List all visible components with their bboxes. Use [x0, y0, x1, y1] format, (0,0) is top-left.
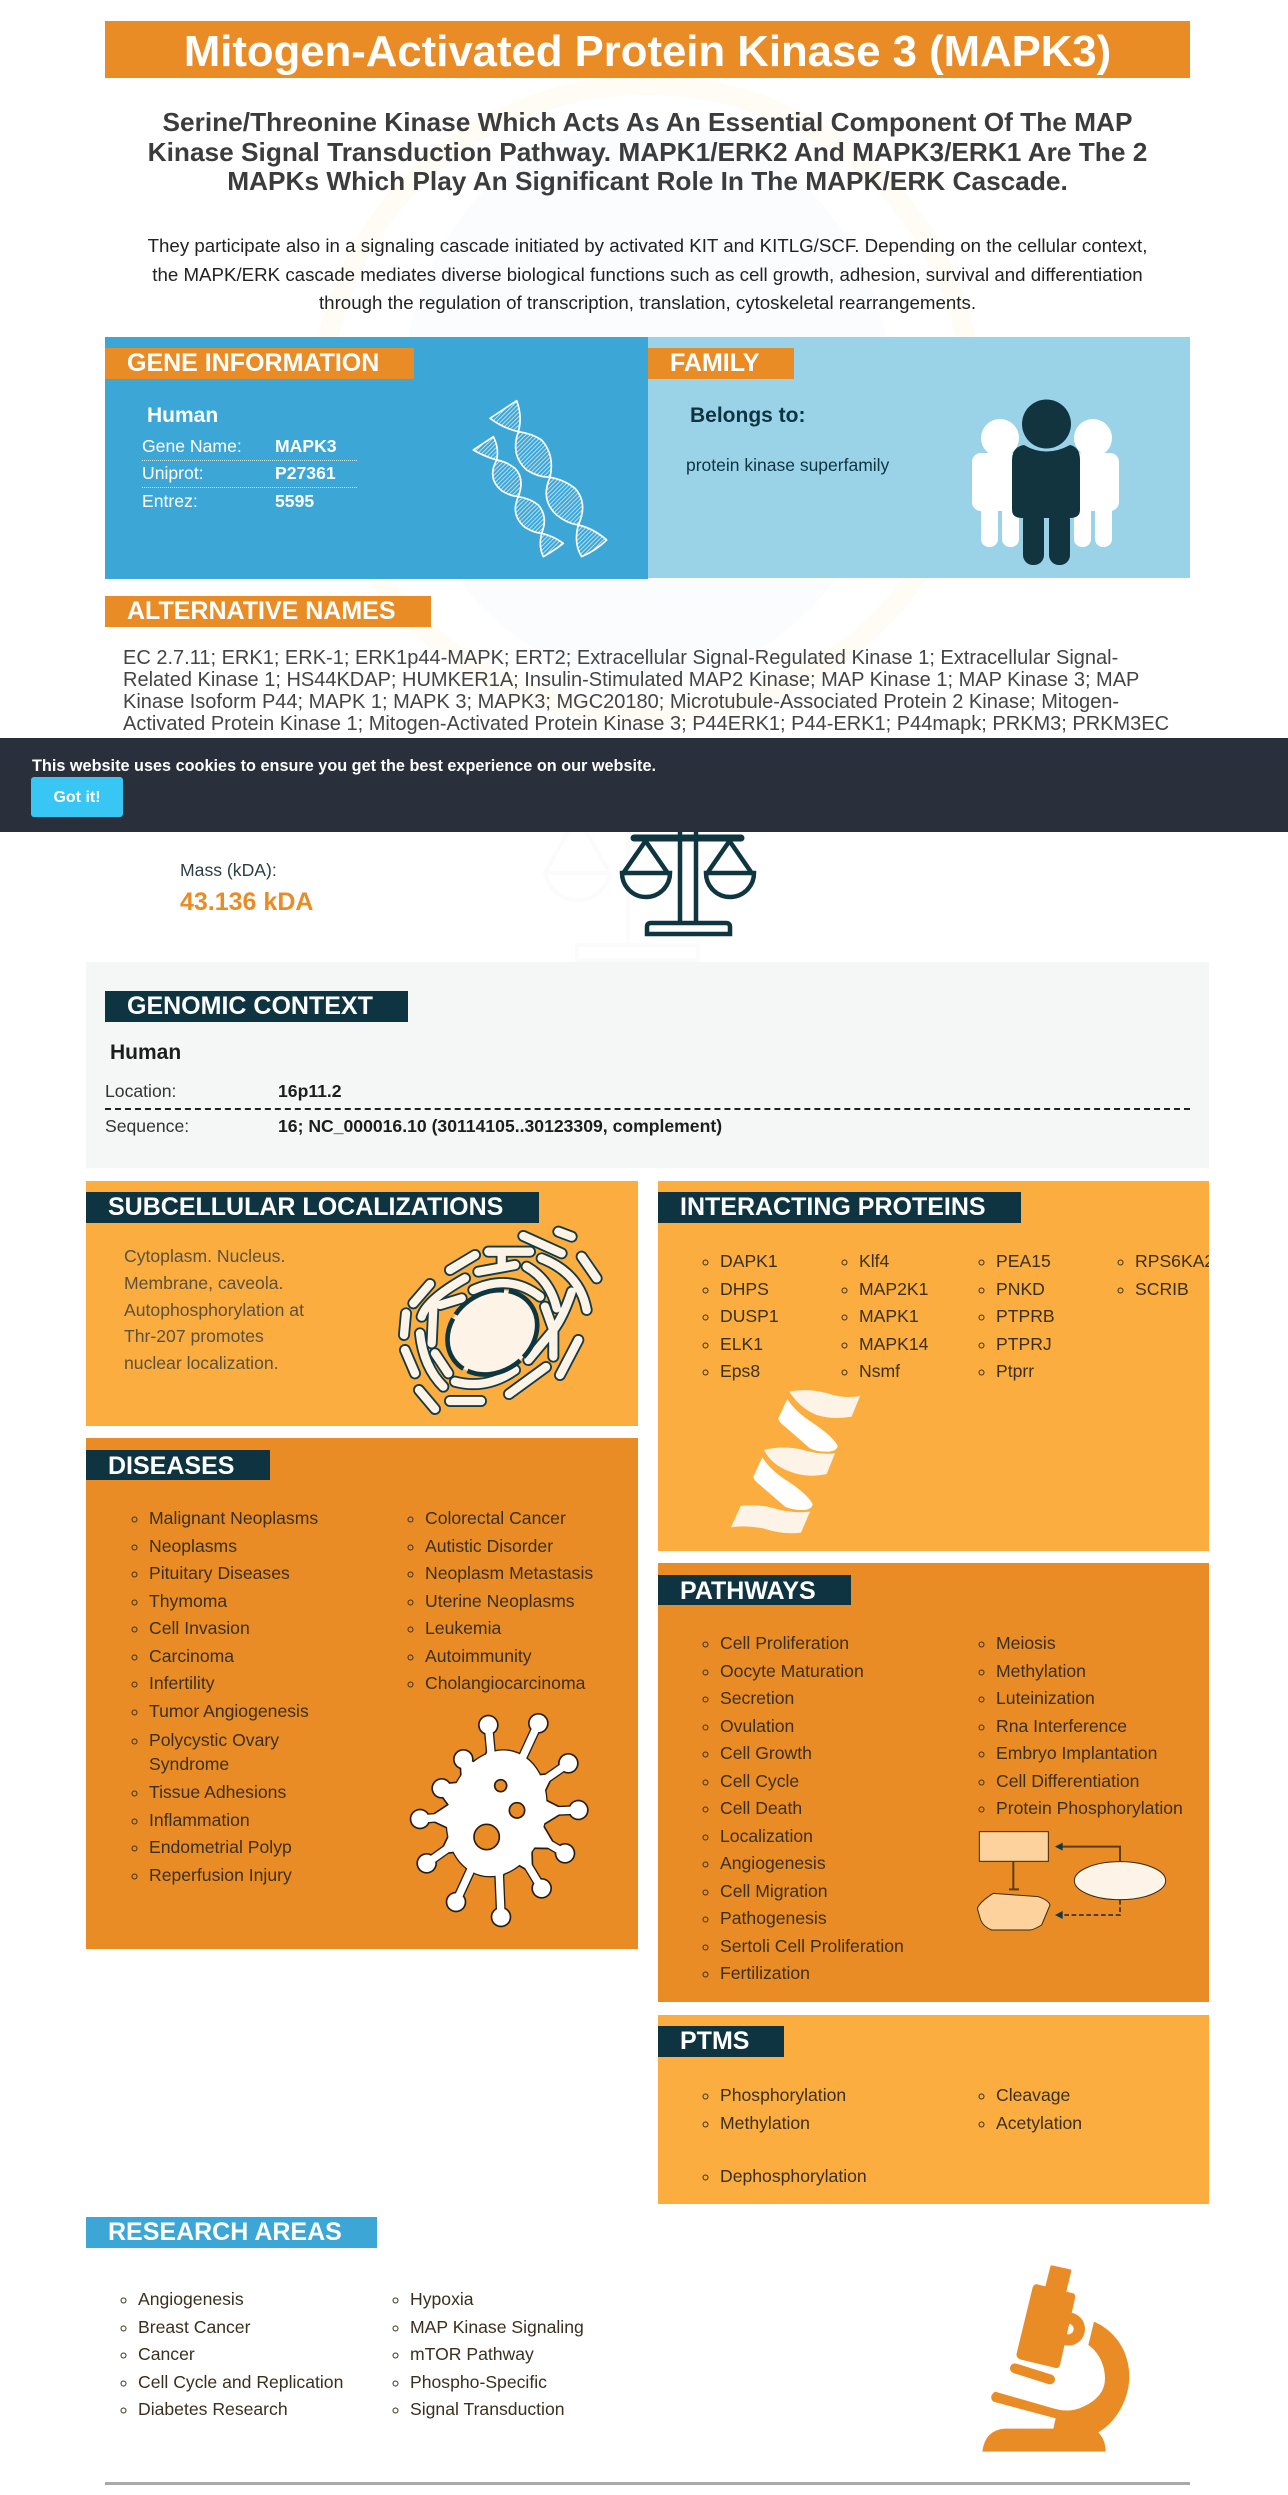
- protein list column 3: PNKD: [996, 1278, 1045, 1298]
- uniprot row: [142, 461, 357, 488]
- heading: pathways: [658, 1575, 851, 1605]
- localization text: Membrane, caveola.: [124, 1273, 283, 1293]
- ptm list column 2: [978, 2085, 1082, 2132]
- pathway list column 2: [978, 1633, 1183, 1818]
- ptm list column 2: Acetylation: [996, 2112, 1082, 2132]
- sequence label: Sequence:: [105, 1116, 189, 1136]
- disease list column 2: [408, 1508, 593, 1693]
- protein list column 1: ELK1: [720, 1334, 763, 1354]
- icon: dna: [472, 400, 608, 558]
- panel: diseases: [86, 1438, 638, 1949]
- research list column 1: Cancer: [138, 2344, 195, 2364]
- pathway list column 1: Cell Cycle: [720, 1770, 799, 1790]
- species label: Human: [110, 1041, 181, 1064]
- protein list column 1: DAPK1: [720, 1251, 778, 1271]
- panel: ptms: [658, 2015, 1209, 2204]
- intro paragraph: [148, 235, 1147, 313]
- pathway list column 2: Protein Phosphorylation: [996, 1798, 1183, 1818]
- subtitle: Kinase Signal Transduction Pathway. MAPK1/ERK2 And MAPK3/ERK1 Are The 2: [148, 136, 1147, 166]
- localization text: Thr-207 promotes: [124, 1326, 264, 1346]
- ptm list column 1: Phosphorylation: [720, 2085, 846, 2105]
- heading: genomic context: GENOMIC CONTEXT: [127, 992, 373, 1020]
- mass label: Mass (kDA):: [180, 860, 277, 880]
- intro paragraph: the MAPK/ERK cascade mediates diverse biological functions such as cell growth, adhesion, survival and differentiation: [152, 264, 1143, 285]
- ptm list column 1: [702, 2085, 867, 2186]
- research list column 1: Angiogenesis: [138, 2289, 244, 2309]
- panel: pathways: [658, 1563, 1209, 2002]
- disease list column 1: Pituitary Diseases: [149, 1563, 290, 1583]
- protein list column 1: [702, 1251, 779, 1381]
- localization text: nuclear localization.: [124, 1353, 279, 1373]
- icon: virus: [410, 1713, 589, 1928]
- icon: balance scale: [620, 832, 756, 936]
- icon: people: [972, 400, 1119, 565]
- intro paragraph: They participate also in a signaling cascade initiated by activated KIT and KITLG/SCF. Depending on the cellular context,: [148, 235, 1147, 256]
- disease list column 1: Syndrome: [149, 1754, 229, 1774]
- disease list column 1: Endometrial Polyp: [149, 1837, 292, 1857]
- gene name row: MAPK3: [275, 436, 337, 456]
- entrez row: 5595: [275, 491, 314, 511]
- protein list column 2: Klf4: [859, 1251, 889, 1271]
- pathway list column 1: Ovulation: [720, 1716, 794, 1736]
- protein list column 3: PEA15: [996, 1251, 1051, 1271]
- family value: protein kinase superfamily: [686, 455, 889, 475]
- intro paragraph: through the regulation of transcription, translation, cytoskeletal rearrangements.: [319, 292, 976, 313]
- pathway list column 1: Cell Proliferation: [720, 1633, 849, 1653]
- alternative names text: Activated Protein Kinase 1; Mitogen-Activated Protein Kinase 3; P44ERK1; P44-ERK1; P44mapk; PRKM3; PRKM3EC: [123, 713, 1169, 735]
- pathway list column 1: Cell Death: [720, 1798, 802, 1818]
- species label: Human: [147, 404, 218, 427]
- pathway list column 2: Methylation: [996, 1660, 1086, 1680]
- research list column 2: Phospho-Specific: [410, 2372, 547, 2392]
- panel: family: [648, 337, 1190, 578]
- icon: cell organelles: [398, 1226, 603, 1415]
- pathway list column 1: Pathogenesis: [720, 1908, 827, 1928]
- protein list column 1: DUSP1: [720, 1306, 779, 1326]
- protein list column 1: Eps8: [720, 1361, 760, 1381]
- protein list column 4: [1118, 1251, 1209, 1298]
- protein list column 2: MAP2K1: [859, 1278, 928, 1298]
- protein list column 3: Ptprr: [996, 1361, 1034, 1381]
- pathway list column 2: Luteinization: [996, 1688, 1095, 1708]
- disease list column 2: Colorectal Cancer: [425, 1508, 566, 1528]
- pathway list column 1: Localization: [720, 1826, 813, 1846]
- disease list column 2: Autoimmunity: [425, 1646, 532, 1666]
- panel: gene information: [105, 337, 648, 579]
- disease list column 1: Polycystic Ovary: [149, 1730, 279, 1750]
- panel: interacting proteins: [658, 1181, 1209, 1551]
- alternative names text: [123, 647, 1169, 735]
- heading: family: [648, 348, 794, 379]
- ptm list column 1: Dephosphorylation: [720, 2166, 867, 2186]
- disease list column 1: Cell Invasion: [149, 1618, 250, 1638]
- subtitle: Serine/Threonine Kinase Which Acts As An Essential Component Of The MAP: [163, 107, 1132, 137]
- research list column 2: Signal Transduction: [410, 2399, 565, 2419]
- pathway list column 2: Cell Differentiation: [996, 1770, 1139, 1790]
- sequence value: 16; NC_000016.10 (30114105..30123309, complement): [278, 1116, 722, 1136]
- entrez row: Entrez:: [142, 491, 198, 511]
- icon: protein ribbon: [731, 1390, 860, 1534]
- protein list column 2: MAPK14: [859, 1334, 928, 1354]
- protein list column 2: [842, 1251, 928, 1381]
- subtitle: MAPKs Which Play An Significant Role In The MAPK/ERK Cascade.: [227, 166, 1068, 196]
- panel: subcellular localizations: [86, 1181, 638, 1426]
- protein list column 1: DHPS: [720, 1278, 769, 1298]
- disease list column 2: Autistic Disorder: [425, 1536, 553, 1556]
- divider: [105, 1108, 1190, 1110]
- disease list column 1: Reperfusion Injury: [149, 1864, 292, 1884]
- disease list column 2: Neoplasm Metastasis: [425, 1563, 593, 1583]
- ptm list column 2: Cleavage: [996, 2085, 1070, 2105]
- alternative names text: Kinase Isoform P44; MAPK 1; MAPK 3; MAPK3; MGC20180; Microtubule-Associated Protein 2 Kinase; Mitogen-: [123, 691, 1119, 713]
- footer rule: [105, 2482, 1190, 2485]
- disease list column 1: [132, 1508, 318, 1884]
- heading: alternative names: ALTERNATIVE NAMES: [127, 597, 396, 625]
- disease list column 1: Thymoma: [149, 1590, 227, 1610]
- research list column 1: Cell Cycle and Replication: [138, 2372, 343, 2392]
- location value: 16p11.2: [278, 1081, 342, 1101]
- gene name row: Gene Name:: [142, 436, 242, 456]
- alternative names text: Related Kinase 1; HS44KDAP; HUMKER1A; Insulin-Stimulated MAP2 Kinase; MAP Kinase 1; MAP Kinase 3; MAP: [123, 669, 1139, 691]
- disease list column 1: Neoplasms: [149, 1536, 237, 1556]
- disease list column 2: Uterine Neoplasms: [425, 1590, 575, 1610]
- watermark: [318, 78, 976, 725]
- heading: diseases: DISEASES: [108, 1452, 234, 1480]
- gene name row: [142, 434, 357, 461]
- pathway list column 1: Sertoli Cell Proliferation: [720, 1936, 904, 1956]
- cookie button: Got it!: [53, 789, 101, 806]
- pathway list column 1: Fertilization: [720, 1963, 810, 1983]
- heading: ptms: PTMS: [680, 2027, 749, 2055]
- ptm list column 1: Methylation: [720, 2112, 810, 2132]
- heading: family: FAMILY: [670, 349, 759, 377]
- pathway list column 2: Rna Interference: [996, 1716, 1127, 1736]
- uniprot row: P27361: [275, 463, 336, 483]
- pathway list column 1: [702, 1633, 904, 1983]
- pathway list column 1: Cell Migration: [720, 1880, 828, 1900]
- heading: ptms: [658, 2026, 784, 2057]
- pathway list column 2: Embryo Implantation: [996, 1743, 1157, 1763]
- subtitle: [148, 107, 1147, 196]
- disease list column 1: Malignant Neoplasms: [149, 1508, 318, 1528]
- disease list column 1: Carcinoma: [149, 1646, 234, 1666]
- disease list column 1: Tissue Adhesions: [149, 1782, 286, 1802]
- disease list column 1: Infertility: [149, 1673, 215, 1693]
- pathway list column 1: Angiogenesis: [720, 1853, 826, 1873]
- localization text: Cytoplasm. Nucleus.: [124, 1246, 285, 1266]
- protein list column 2: MAPK1: [859, 1306, 919, 1326]
- protein list column 2: Nsmf: [859, 1361, 900, 1381]
- location label: Location:: [105, 1081, 176, 1101]
- uniprot row: Uniprot:: [142, 463, 204, 483]
- pathway list column 1: Cell Growth: [720, 1743, 812, 1763]
- mass value: 43.136 kDA: [180, 888, 313, 916]
- protein list column 3: [978, 1251, 1055, 1381]
- pathway list column 1: Oocyte Maturation: [720, 1660, 864, 1680]
- research list column 1: Breast Cancer: [138, 2316, 250, 2336]
- research list column 1: Diabetes Research: [138, 2399, 288, 2419]
- disease list column 1: Inflammation: [149, 1810, 250, 1830]
- disease list column 1: Tumor Angiogenesis: [149, 1700, 309, 1720]
- research list column 1: [120, 2289, 343, 2419]
- localization text: Autophosphorylation at: [124, 1300, 304, 1320]
- research list column 2: mTOR Pathway: [410, 2344, 534, 2364]
- heading: gene information: GENE INFORMATION: [127, 349, 379, 377]
- heading: research areas: RESEARCH AREAS: [108, 2218, 342, 2246]
- cookie banner: [0, 738, 1288, 832]
- entrez row: [142, 491, 314, 511]
- heading: interacting proteins: INTERACTING PROTEINS: [680, 1193, 986, 1221]
- belongs to label: Belongs to:: [690, 404, 806, 427]
- icon: microscope: [982, 2265, 1130, 2452]
- cookie message: This website uses cookies to ensure you get the best experience on our website.: [32, 757, 656, 775]
- cookie button: [31, 777, 123, 817]
- heading: subcellular localizations: SUBCELLULAR LOCALIZATIONS: [108, 1193, 503, 1221]
- disease list column 2: Leukemia: [425, 1618, 501, 1638]
- heading: pathways: PATHWAYS: [680, 1577, 816, 1605]
- heading: diseases: [86, 1450, 270, 1480]
- panel: genomic context: [86, 962, 1209, 1168]
- pathway list column 2: Meiosis: [996, 1633, 1056, 1653]
- research list column 2: Hypoxia: [410, 2289, 474, 2309]
- alternative names text: EC 2.7.11; ERK1; ERK-1; ERK1p44-MAPK; ERT2; Extracellular Signal-Regulated Kinase 1; Extracellular Signal-: [123, 647, 1118, 669]
- protein list column 4: SCRIB: [1135, 1278, 1189, 1298]
- localization text: [124, 1246, 304, 1373]
- title: Mitogen-Activated Protein Kinase 3 (MAPK3): [184, 27, 1111, 76]
- protein list column 3: PTPRB: [996, 1306, 1055, 1326]
- pathway list column 1: Secretion: [720, 1688, 794, 1708]
- research list column 2: MAP Kinase Signaling: [410, 2316, 584, 2336]
- icon: pathway diagram: [976, 1831, 1166, 1930]
- protein list column 3: PTPRJ: [996, 1334, 1052, 1354]
- research list column 2: [392, 2289, 584, 2419]
- disease list column 2: Cholangiocarcinoma: [425, 1673, 585, 1693]
